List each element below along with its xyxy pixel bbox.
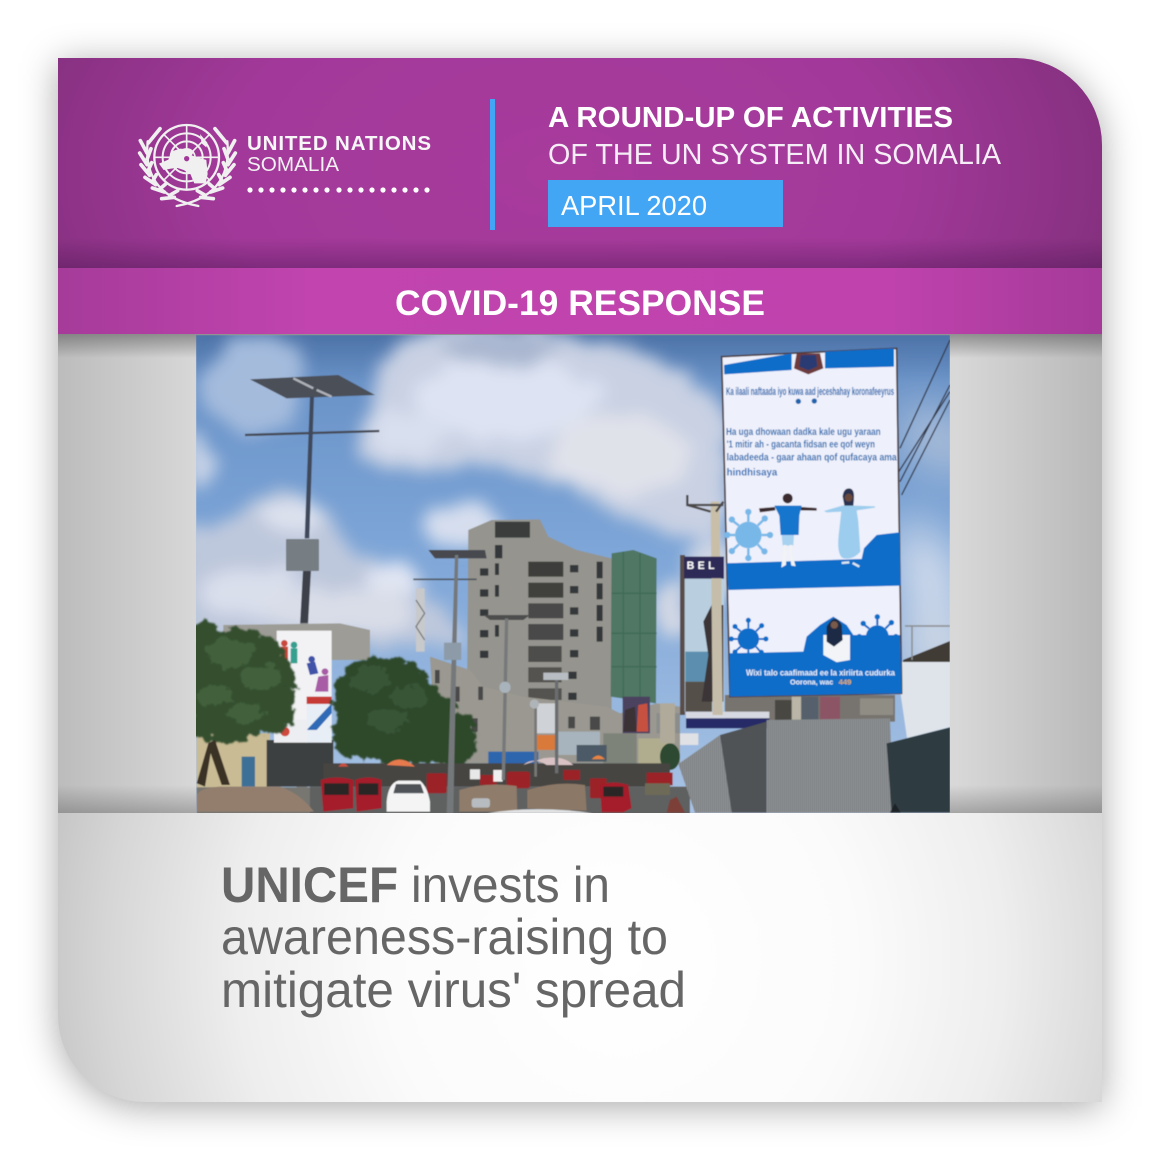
corrugated fence	[667, 718, 950, 813]
left billboard: BEL	[684, 557, 724, 715]
billboard slogan: Ka ilaali naftaada iyo kuwa aad jeceshahay koronafeeyrus	[726, 386, 894, 398]
heading: round-up of activities: OF THE UN SYSTEM IN SOMALIA	[548, 139, 1002, 171]
banner: COVID-19 response: COVID-19 RESPONSE	[395, 284, 765, 323]
panel: grey photo backdrop	[58, 334, 1102, 813]
divider	[490, 99, 495, 230]
street and traffic	[197, 755, 690, 815]
tree and buildings, left	[185, 620, 477, 793]
billboard slogan: Ha uga dhowaan dadka kale ugu yaraan	[726, 427, 881, 438]
telecom mast	[416, 588, 425, 652]
date tag: April 2020	[548, 180, 783, 227]
wires and background buildings, right	[896, 340, 950, 738]
caption: UNICEF invests in awareness-raising: awareness-raising to	[221, 909, 668, 965]
bottom blue panel	[729, 617, 902, 697]
billboard slogan: labadeeda - gaar ahaan qof qufacaya ama	[727, 452, 897, 463]
panel: bottom caption background	[58, 813, 1102, 1102]
virus, dark	[729, 618, 768, 660]
panel: purple header background	[58, 58, 1102, 268]
billboard slogan: '1 mitir ah - gacanta fidsan ee qof weyn	[727, 439, 875, 450]
billboard footer text	[746, 669, 896, 687]
low buildings beneath the billboard	[660, 695, 895, 745]
logo text: United Nations Somalia: SOMALIA	[247, 154, 340, 176]
sky with clouds	[182, 325, 963, 813]
banner: COVID-19 response	[58, 268, 1102, 334]
street lamp, left	[245, 375, 379, 813]
billboard header	[724, 348, 894, 374]
photo: street with awareness billboard	[182, 325, 963, 815]
street lamp, centre	[413, 550, 568, 813]
caption: UNICEF invests in awareness-raising	[221, 857, 686, 1018]
logo: UN emblem	[140, 125, 235, 206]
left billboard: BEL: BEL	[687, 560, 718, 572]
logo text: United Nations Somalia: UNITED NATIONS	[247, 132, 431, 155]
date tag: April 2020: APRIL 2020	[561, 190, 707, 221]
caption: UNICEF invests in awareness-raising: UNICEF	[221, 857, 398, 913]
billboard slogan: hindhisaya	[727, 468, 778, 479]
logo text: United Nations Somalia	[247, 132, 431, 193]
caption: UNICEF invests in awareness-raising: mitigate virus' spread	[221, 962, 686, 1018]
figure: woman	[824, 488, 875, 567]
heading: round-up of activities: A ROUND-UP OF ACTIVITIES	[548, 102, 953, 134]
billboard footer text: 449	[839, 678, 851, 687]
heading: round-up of activities	[548, 102, 1002, 171]
awareness billboard	[722, 348, 902, 697]
utility pole	[680, 495, 723, 715]
caption: UNICEF invests in awareness-raising: invests in	[411, 857, 610, 913]
virus, light	[724, 509, 773, 561]
building	[430, 519, 680, 772]
blue wave band	[727, 532, 901, 590]
billboard footer text: Oorona, wac	[790, 678, 834, 687]
billboard footer text: Wixi talo caafimaad ee la xiriirta cudurka	[746, 669, 896, 678]
figure: person coughing	[823, 619, 850, 662]
figure: boy	[759, 493, 817, 568]
billboard slogan	[726, 386, 897, 479]
